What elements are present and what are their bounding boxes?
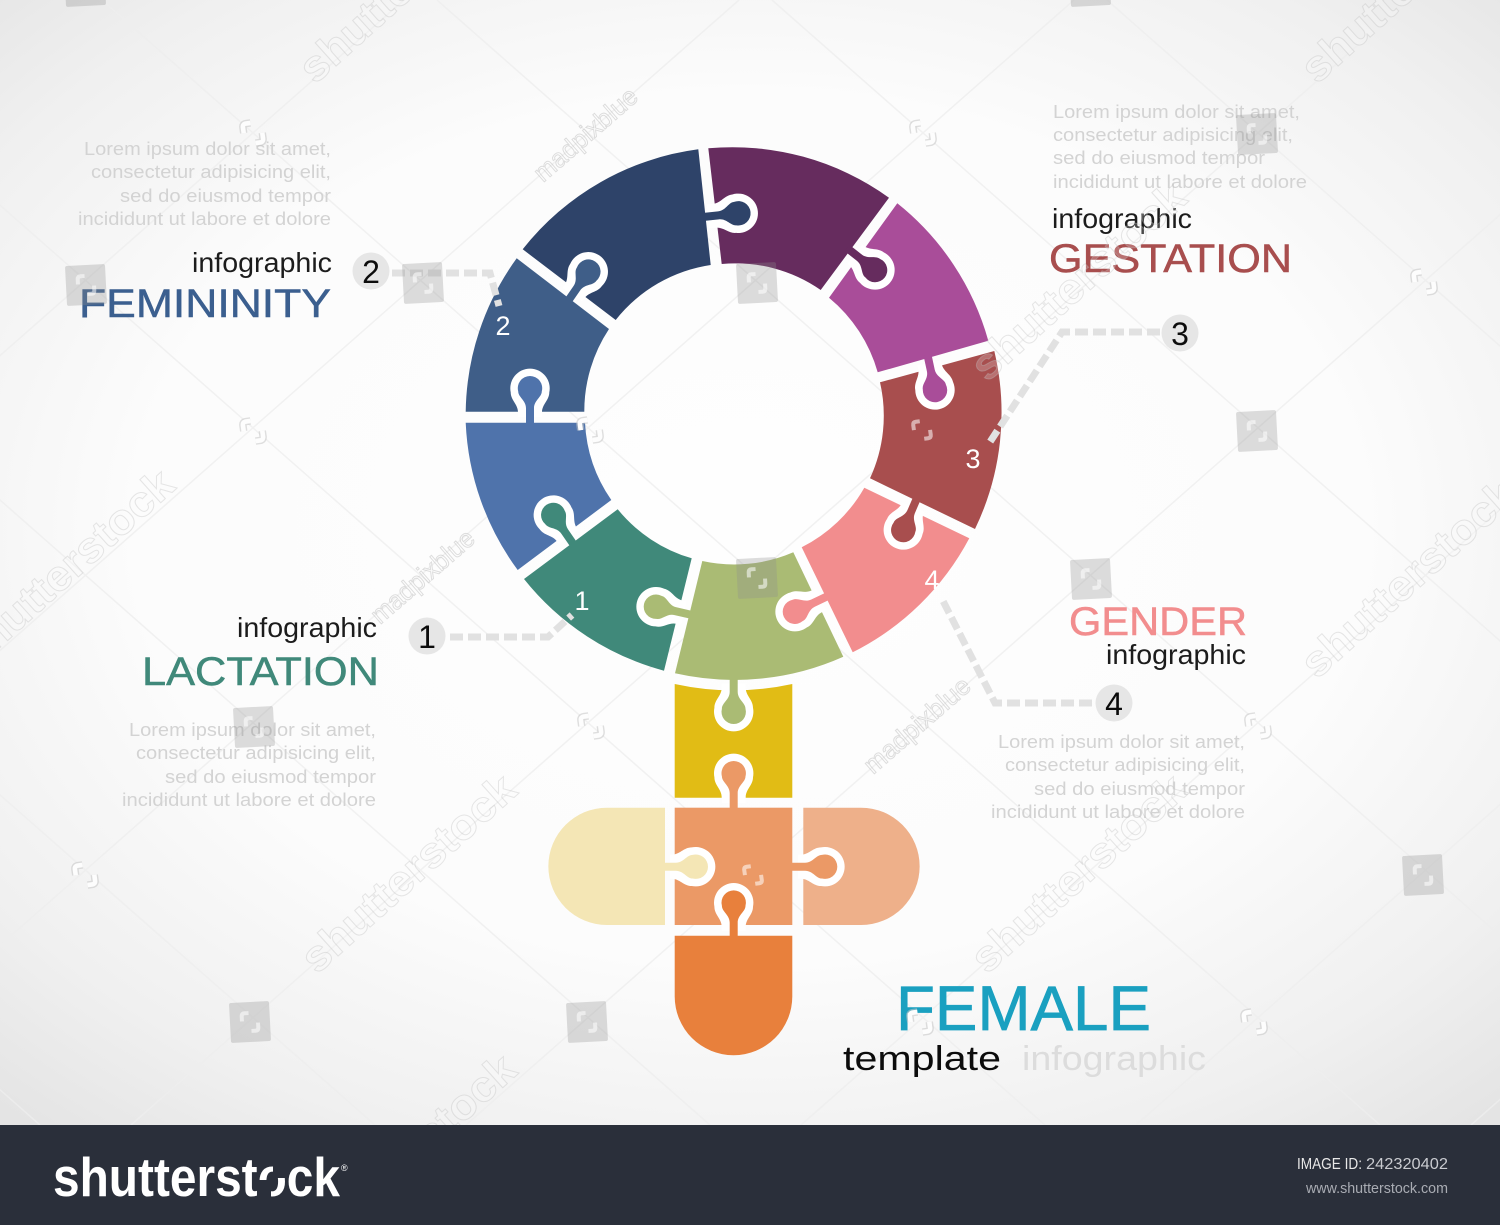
footer bar bbox=[0, 1125, 1500, 1225]
watermark small icons bbox=[74, 121, 1435, 1034]
callout badge 3 bbox=[1162, 314, 1198, 352]
stem segment: yellow bbox=[675, 684, 792, 798]
callout badge 1: 1 bbox=[418, 619, 436, 655]
puzzle knob: orange to center bbox=[714, 883, 753, 938]
registered mark: ® bbox=[341, 1163, 348, 1173]
body text bbox=[122, 719, 376, 810]
title: template: template bbox=[843, 1040, 1001, 1078]
body text: incididunt ut labore et dolore bbox=[1053, 171, 1307, 192]
cross arm left: pale yellow bbox=[548, 808, 665, 925]
body text: Lorem ipsum dolor sit amet, bbox=[1053, 101, 1300, 122]
puzzle knob: pale yellow bbox=[663, 847, 715, 886]
website url: www.shutterstock.com bbox=[1305, 1181, 1448, 1197]
connector: gestation bbox=[988, 332, 1160, 445]
segment number 1: 1 bbox=[574, 586, 590, 616]
body text: sed do eiusmod tempor bbox=[120, 185, 331, 206]
body text: Lorem ipsum dolor sit amet, bbox=[998, 731, 1245, 752]
ring segment: pink bbox=[802, 488, 969, 652]
title: infographic: infographic bbox=[1022, 1040, 1206, 1078]
ring segment: red bbox=[870, 351, 1002, 529]
segment number 3: 3 bbox=[965, 444, 981, 474]
callout badge 3: 3 bbox=[1171, 316, 1189, 352]
female symbol puzzle chart bbox=[466, 147, 1002, 1055]
stem bottom: orange bbox=[675, 936, 792, 1055]
callout badge 2: 2 bbox=[362, 254, 380, 290]
text block: gender bbox=[991, 600, 1247, 822]
callout badge 1 bbox=[408, 618, 446, 655]
ring segment: purple bbox=[708, 147, 889, 290]
puzzle knob: navy bbox=[701, 192, 760, 237]
ring segment: blue bbox=[466, 423, 611, 570]
body text: consectetur adipisicing elit, bbox=[1053, 124, 1293, 145]
ring segment: steel blue bbox=[466, 258, 609, 412]
text block: lactation bbox=[122, 612, 379, 810]
puzzle knob: pink bbox=[769, 577, 839, 638]
callout badge 2 bbox=[352, 252, 390, 290]
watermark text: madpixblue bbox=[527, 81, 644, 188]
body text: consectetur adipisicing elit, bbox=[1005, 754, 1245, 775]
text block: gestation bbox=[1049, 101, 1307, 281]
body text bbox=[78, 138, 331, 229]
ring segment: teal bbox=[524, 509, 692, 671]
body text bbox=[1053, 101, 1307, 192]
callout badge 4 bbox=[1096, 684, 1132, 722]
subheading: infographic bbox=[192, 247, 332, 278]
puzzle knob: purple bbox=[835, 233, 903, 298]
title bbox=[843, 974, 1206, 1078]
connector: femininity bbox=[392, 273, 499, 306]
body text: incididunt ut labore et dolore bbox=[78, 208, 331, 229]
puzzle knob: olive to teal bbox=[632, 583, 696, 634]
puzzle knob: center to yellow bbox=[714, 754, 753, 810]
body text: sed do eiusmod tempor bbox=[165, 766, 376, 787]
connector: gender bbox=[941, 597, 1092, 703]
ring segment: olive bbox=[675, 552, 843, 680]
logo bracket cuts bbox=[257, 1160, 288, 1199]
body text: Lorem ipsum dolor sit amet, bbox=[129, 719, 376, 740]
puzzle knob: olive to yellow bbox=[714, 678, 753, 731]
ring segment: magenta bbox=[829, 203, 988, 372]
image id number: 242320402 bbox=[1366, 1156, 1448, 1173]
body text bbox=[991, 731, 1245, 822]
puzzle knob: teal bbox=[526, 488, 590, 556]
puzzle knob: blue bbox=[510, 369, 550, 426]
body text: sed do eiusmod tempor bbox=[1053, 147, 1265, 168]
heading: GESTATION bbox=[1049, 237, 1292, 281]
body text: incididunt ut labore et dolore bbox=[122, 789, 376, 810]
body text: Lorem ipsum dolor sit amet, bbox=[84, 138, 331, 159]
cross arm right: light orange bbox=[803, 808, 920, 925]
watermark text: shutterstock bbox=[292, 765, 526, 982]
puzzle knob: steel blue bbox=[552, 244, 616, 312]
body text: sed do eiusmod tempor bbox=[1034, 778, 1245, 799]
subheading: infographic bbox=[1052, 203, 1192, 234]
heading: FEMININITY bbox=[79, 282, 331, 326]
footer logo: shutterstock bbox=[53, 1146, 340, 1208]
watermark text: shutterstock bbox=[962, 173, 1196, 390]
title: female: FEMALE bbox=[896, 974, 1151, 1044]
image id label: IMAGE ID: bbox=[1297, 1156, 1362, 1173]
heading: LACTATION bbox=[142, 650, 379, 694]
connector: lactation bbox=[450, 615, 572, 637]
watermark text: madpixblue bbox=[857, 670, 977, 780]
watermark text: shutterstock bbox=[962, 765, 1196, 982]
puzzle knob: magenta bbox=[908, 351, 958, 413]
body text: consectetur adipisicing elit, bbox=[91, 161, 331, 182]
watermark text: madpixblue bbox=[364, 523, 481, 630]
segment number 4: 4 bbox=[924, 565, 940, 595]
body text: consectetur adipisicing elit, bbox=[136, 742, 376, 763]
puzzle knob: red bbox=[877, 490, 935, 556]
heading: GENDER bbox=[1069, 600, 1247, 644]
puzzle knob: center to light orange bbox=[791, 847, 845, 886]
ring segment: navy bbox=[523, 149, 711, 320]
watermark squares bbox=[64, 0, 1444, 1043]
subheading: infographic bbox=[237, 612, 377, 643]
callout badge 4: 4 bbox=[1105, 686, 1123, 722]
segment number 2: 2 bbox=[495, 311, 511, 341]
subheading: infographic bbox=[1106, 639, 1246, 670]
body text: incididunt ut labore et dolore bbox=[991, 801, 1245, 822]
text block: femininity bbox=[78, 138, 332, 326]
cross center: orange bbox=[675, 808, 792, 925]
